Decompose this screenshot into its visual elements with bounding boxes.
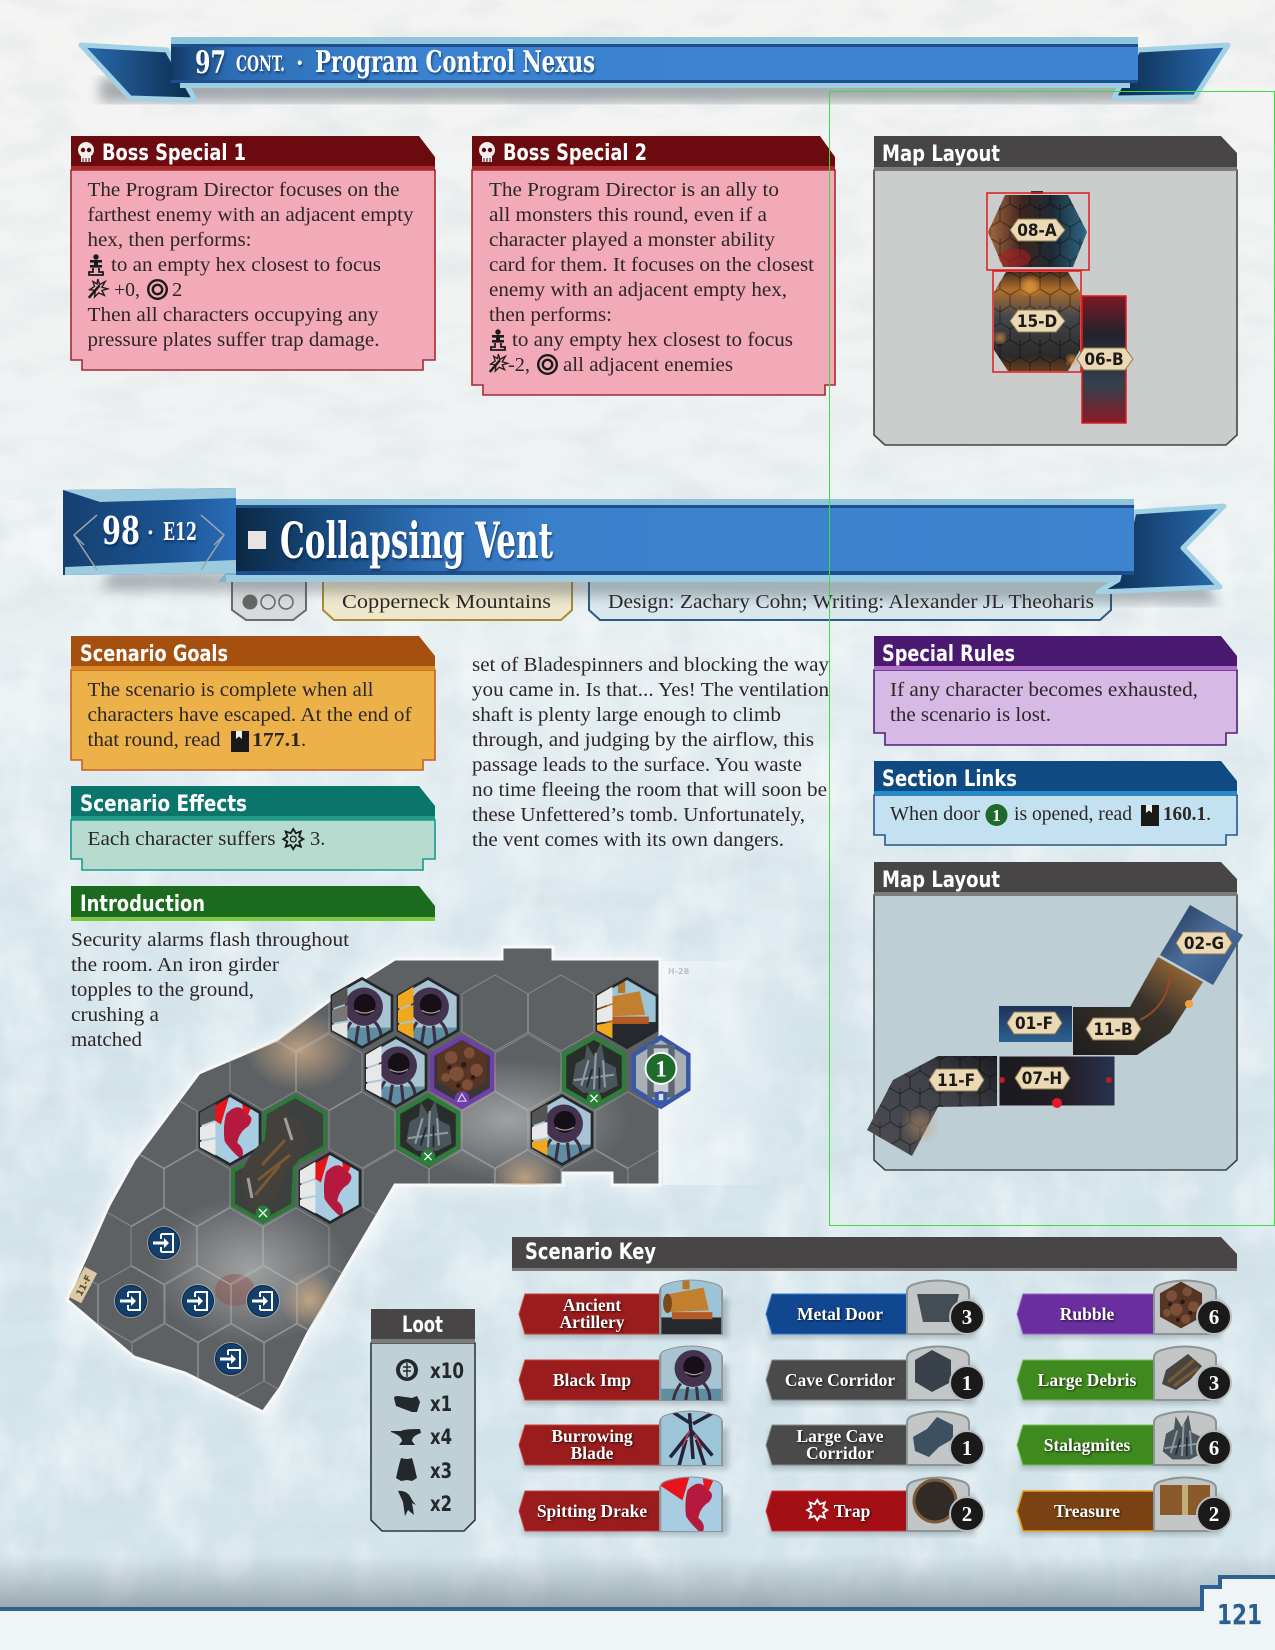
text: boss special 1 rules: to an empty hex closest to focus xyxy=(111,254,381,276)
map tile: 01-F xyxy=(999,1006,1072,1042)
panel: Boss Special 1 xyxy=(71,136,435,370)
loot rows: x1 xyxy=(430,1392,452,1416)
text: special rules: the scenario is lost. xyxy=(890,704,1051,726)
title: 97 cont. Program Control Nexus xyxy=(195,45,595,81)
panel: Boss Special 2 xyxy=(472,136,835,395)
text: boss special 1 rules xyxy=(88,179,414,351)
map tile: 11-F xyxy=(867,1056,997,1156)
panel: Scenario Goals xyxy=(71,636,435,770)
key: Spitting Drake xyxy=(518,1476,730,1538)
starting position tokens xyxy=(114,1226,280,1376)
tag: difficulty xyxy=(232,575,306,620)
map tile: 07-H: 07-H xyxy=(1022,1069,1062,1089)
text: section links: 1 xyxy=(992,806,1001,825)
badge: scenario number tab: · xyxy=(147,520,154,546)
text: goals: 177.1 xyxy=(252,729,301,751)
panel: Loot xyxy=(371,1309,475,1531)
map tile: 01-F: 01-F xyxy=(1015,1014,1053,1034)
key: Large Debris: 3 xyxy=(1209,1371,1219,1395)
map tile: 06-B: 06-B xyxy=(1084,350,1124,370)
loot rows xyxy=(391,1359,464,1516)
key: Rubble: 6 xyxy=(1209,1305,1219,1329)
map tile: 11-B: 11-B xyxy=(1093,1020,1133,1040)
key: Trap: 2 xyxy=(962,1502,972,1526)
loot rows: x4 xyxy=(430,1425,452,1449)
token: spitting drake 1 xyxy=(199,1094,261,1166)
token: metal door 1 xyxy=(634,1037,688,1107)
key: Large Cave Corridor: 1 xyxy=(962,1436,972,1460)
scenario map xyxy=(32,947,793,1412)
token: metal door 1: 1 xyxy=(655,1057,667,1083)
heading: Scenario Goals: Scenario Goals xyxy=(80,642,228,667)
text: boss special 2 rules: then performs: xyxy=(489,304,612,326)
text: boss special 2 rules: to any empty hex closest to focus xyxy=(512,329,793,351)
text: boss special 2 rules: all monsters this round, even if a xyxy=(489,204,767,226)
key: Burrowing Blade: Blade xyxy=(571,1443,614,1463)
text: introduction left xyxy=(71,929,349,1051)
text: introduction continued: through, and judging by the airflow, this xyxy=(472,729,814,751)
key: Treasure: 2 xyxy=(1209,1502,1219,1526)
key: Ancient Artillery: Artillery xyxy=(559,1312,625,1332)
text: boss special 2 rules: character played a monster ability xyxy=(489,229,776,251)
token: black imp 1 xyxy=(331,977,393,1049)
text: special rules: If any character becomes exhausted, xyxy=(890,679,1198,701)
text: effects: Each character suffers xyxy=(88,828,276,850)
token: black imp 2 xyxy=(397,977,459,1049)
map tile: 02-G xyxy=(1160,905,1243,985)
tile tag: 11-F xyxy=(75,1274,94,1298)
key: Large Cave Corridor xyxy=(766,1412,984,1469)
map floor xyxy=(32,947,661,1412)
icon: skull xyxy=(479,142,495,162)
panel: Special Rules xyxy=(874,636,1237,745)
text: introduction continued: the vent comes with its own dangers. xyxy=(472,829,784,851)
panel: Section Links xyxy=(874,761,1237,845)
banner: 97 cont. Program Control Nexus xyxy=(81,37,1228,102)
loot rows: x3 xyxy=(430,1459,452,1483)
text: boss special 1 rules: 2 xyxy=(172,279,182,301)
map tile: 07-H xyxy=(999,1056,1115,1108)
text: boss special 1 rules: hex, then performs: xyxy=(88,229,252,251)
key: Trap xyxy=(766,1478,984,1535)
text: introduction left: Security alarms flash throughout xyxy=(71,929,349,951)
text: section links: When door xyxy=(890,803,980,825)
text: introduction left: crushing a xyxy=(71,1004,159,1026)
key: Spitting Drake: Spitting Drake xyxy=(537,1501,647,1521)
map tile: 02-G: 02-G xyxy=(1184,934,1224,954)
map tile: 15-D xyxy=(993,271,1081,372)
map tile: 08-A: 08-A xyxy=(1017,221,1057,241)
heading: Scenario Effects: Scenario Effects xyxy=(80,792,247,817)
checkbox xyxy=(248,531,266,549)
key: Burrowing Blade: Burrowing xyxy=(551,1426,633,1446)
key: Cave Corridor: 1 xyxy=(962,1371,972,1395)
heading: Map Layout: Map Layout xyxy=(882,868,1000,893)
key: Stalagmites: Stalagmites xyxy=(1044,1435,1130,1455)
badge: scenario number tab xyxy=(63,488,236,575)
text: boss special 2 rules: card for them. It focuses on the closest xyxy=(489,254,814,276)
panel: Scenario Effects xyxy=(71,786,435,870)
text: boss special 1 rules: The Program Director focuses on the xyxy=(88,179,400,201)
token: black imp 3 xyxy=(365,1036,427,1108)
text: goals: The scenario is complete when all xyxy=(88,679,374,701)
text: boss special 2 rules: enemy with an adjacent empty hex, xyxy=(489,279,787,301)
key: Ancient Artillery xyxy=(518,1280,730,1340)
text: introduction left: matched xyxy=(71,1029,142,1051)
token: large debris xyxy=(233,1096,325,1222)
banner: 98 E12 Collapsing Vent xyxy=(63,488,1224,604)
loot rows: x2 xyxy=(430,1492,452,1516)
text: boss special 1 rules: pressure plates suffer trap damage. xyxy=(88,329,380,351)
map tile: 06-B xyxy=(1077,296,1133,423)
text: goals: characters have escaped. At the end of xyxy=(88,704,412,726)
badge: scenario number tab: E12 xyxy=(163,517,197,546)
annotation: green outline rectangle xyxy=(830,92,1274,1226)
text: goals: . xyxy=(301,729,306,751)
heading: Boss Special 2: Boss Special 2 xyxy=(503,141,647,166)
panel: Introduction heading: Introduction xyxy=(80,892,205,917)
text: section links: . xyxy=(1206,803,1211,825)
page footer xyxy=(0,1555,1275,1650)
text: introduction left: topples to the ground, xyxy=(71,979,254,1001)
key: Stalagmites xyxy=(1017,1412,1231,1469)
text: goals: that round, read xyxy=(88,729,220,751)
key: Treasure: Treasure xyxy=(1054,1501,1120,1521)
map tile: 11-B xyxy=(1073,957,1203,1055)
token: spitting drake 2 xyxy=(299,1152,361,1224)
token: stalagmites 2 xyxy=(564,1037,624,1107)
key: Large Debris: Large Debris xyxy=(1038,1370,1137,1390)
text: introduction continued: passage leads to the surface. You waste xyxy=(472,754,802,776)
tag: credits xyxy=(589,575,1111,620)
key: Stalagmites: 6 xyxy=(1209,1436,1219,1460)
text: introduction continued: these Unfettered’s tomb. Unfortunately, xyxy=(472,804,805,826)
text: introduction continued xyxy=(472,654,830,851)
key: Cave Corridor: Cave Corridor xyxy=(785,1370,895,1390)
key: Rubble: Rubble xyxy=(1060,1304,1114,1324)
heading: Loot: Loot xyxy=(402,1313,443,1338)
panel: Map Layout (scenario 98) xyxy=(867,862,1243,1170)
token: black imp 4 xyxy=(531,1094,593,1166)
tag: location xyxy=(323,575,572,620)
key: Metal Door xyxy=(766,1280,984,1338)
text: introduction continued: no time fleeing the room that will soon be xyxy=(472,779,827,801)
heading: Section Links: Section Links xyxy=(882,767,1017,792)
text: boss special 1 rules: Then all characters occupying any xyxy=(88,304,379,326)
text: section links: is opened, read xyxy=(1014,803,1132,825)
key: Burrowing Blade xyxy=(518,1410,730,1472)
text: introduction left: the room. An iron girder xyxy=(71,954,279,976)
tag: location: Copperneck Mountains xyxy=(342,591,551,613)
heading: Special Rules: Special Rules xyxy=(882,642,1015,667)
text: boss special 2 rules: all adjacent enemies xyxy=(563,354,733,376)
text: introduction continued: shaft is plenty large enough to climb xyxy=(472,704,781,726)
text: effects: 3. xyxy=(310,828,325,850)
text: introduction continued: set of Bladespinners and blocking the way xyxy=(472,654,830,676)
title: 97 cont. Program Control Nexus: CONT. xyxy=(236,51,285,76)
text: boss special 2 rules xyxy=(489,179,814,376)
key: Cave Corridor xyxy=(766,1346,984,1404)
heading: Scenario Key: Scenario Key xyxy=(525,1240,656,1265)
title: 97 cont. Program Control Nexus: 97 xyxy=(195,45,226,81)
page number: 121 xyxy=(1217,1598,1262,1631)
text: goals xyxy=(88,679,412,752)
key: Rubble xyxy=(1017,1280,1231,1338)
badge: scenario number tab: 98 xyxy=(102,508,140,553)
text: special rules xyxy=(890,679,1198,726)
token: ancient artillery xyxy=(596,977,658,1049)
map tile: 11-F: 11-F xyxy=(937,1071,975,1091)
map tile: 08-A xyxy=(987,191,1089,270)
key: Trap: Trap xyxy=(834,1501,871,1521)
text: boss special 1 rules: farthest enemy with an adjacent empty xyxy=(88,204,414,226)
panel: Scenario Key xyxy=(512,1237,1237,1541)
token: stalagmites 1 xyxy=(398,1095,458,1165)
text: section links xyxy=(890,803,1211,826)
key: Black Imp: Black Imp xyxy=(553,1370,631,1390)
panel: Introduction heading xyxy=(71,886,435,921)
heading: Map Layout: Map Layout xyxy=(882,142,1000,167)
scenario map: H-28 xyxy=(668,967,690,976)
text: introduction continued: you came in. Is that... Yes! The ventilation xyxy=(472,679,829,701)
token: rubble xyxy=(432,1037,492,1107)
tile tag xyxy=(69,1267,97,1303)
key: Large Cave Corridor: Large Cave xyxy=(796,1426,884,1446)
tag: credits: Design: Zachary Cohn; Writing: Alexander JL Theoharis xyxy=(608,591,1094,613)
loot rows: x10 xyxy=(430,1359,464,1383)
title: Collapsing Vent: Collapsing Vent xyxy=(280,511,553,570)
text: boss special 2 rules: -2, xyxy=(508,354,530,376)
text: boss special 2 rules: The Program Director is an ally to xyxy=(489,179,779,201)
text: boss special 1 rules: +0, xyxy=(114,279,140,301)
key: Metal Door: Metal Door xyxy=(797,1304,883,1324)
icon: skull xyxy=(78,142,94,162)
key: Large Cave Corridor: Corridor xyxy=(806,1443,874,1463)
title: 97 cont. Program Control Nexus: · xyxy=(296,48,304,77)
text: section links: 160.1 xyxy=(1163,803,1206,825)
key: Black Imp xyxy=(518,1346,730,1406)
key: Treasure xyxy=(1017,1478,1231,1535)
key: Ancient Artillery: Ancient xyxy=(563,1295,621,1315)
map tile: 15-D: 15-D xyxy=(1017,312,1057,332)
key: Metal Door: 3 xyxy=(962,1305,972,1329)
panel: Map Layout (scenario 97) xyxy=(874,136,1237,445)
key: Large Debris xyxy=(1017,1346,1231,1404)
heading: Boss Special 1: Boss Special 1 xyxy=(102,141,246,166)
title: 97 cont. Program Control Nexus: Program Control Nexus xyxy=(315,45,595,80)
